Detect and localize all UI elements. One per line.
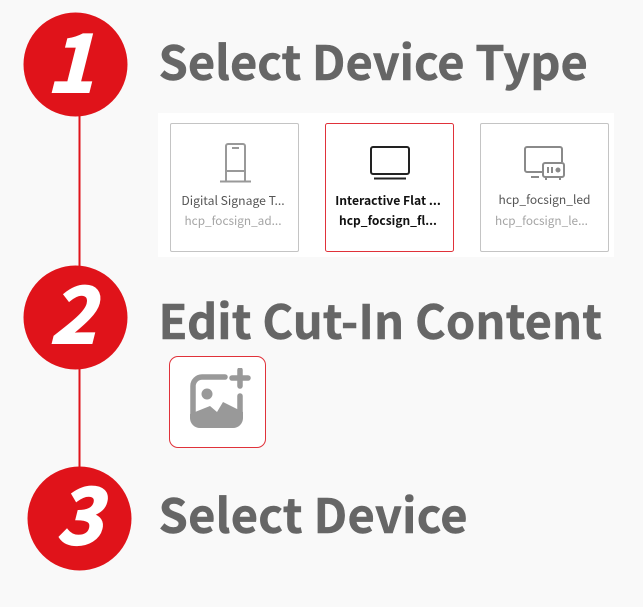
step 3 badge: [28, 466, 132, 570]
icon: monitor: [370, 146, 410, 180]
heading: Select Device: Select Device: [158, 478, 468, 546]
image upload tile: [169, 356, 266, 448]
sublabel: hcp_focsign_le...: [495, 212, 588, 229]
label: Digital Signage T...: [181, 191, 285, 209]
device type panel: [158, 113, 614, 257]
heading: Edit Cut-In Content: Edit Cut-In Content: [158, 284, 602, 352]
selected card outline: [325, 123, 454, 252]
icon: led display: [524, 146, 565, 180]
card: interactive flat panel (selected): [325, 123, 454, 252]
card: digital signage: [170, 123, 299, 252]
icon: add image: [190, 368, 251, 428]
sublabel: hcp_focsign_fl...: [339, 212, 437, 229]
label: hcp_focsign_led: [499, 191, 590, 208]
icon: signage stand: [220, 143, 251, 182]
heading: Select Device Type: Select Device Type: [158, 25, 588, 94]
sublabel: hcp_focsign_ad...: [185, 212, 281, 229]
step 2 badge: [24, 265, 128, 370]
step 1 badge: [24, 12, 128, 116]
card: led: [480, 123, 609, 252]
label: Interactive Flat ...: [335, 191, 441, 209]
